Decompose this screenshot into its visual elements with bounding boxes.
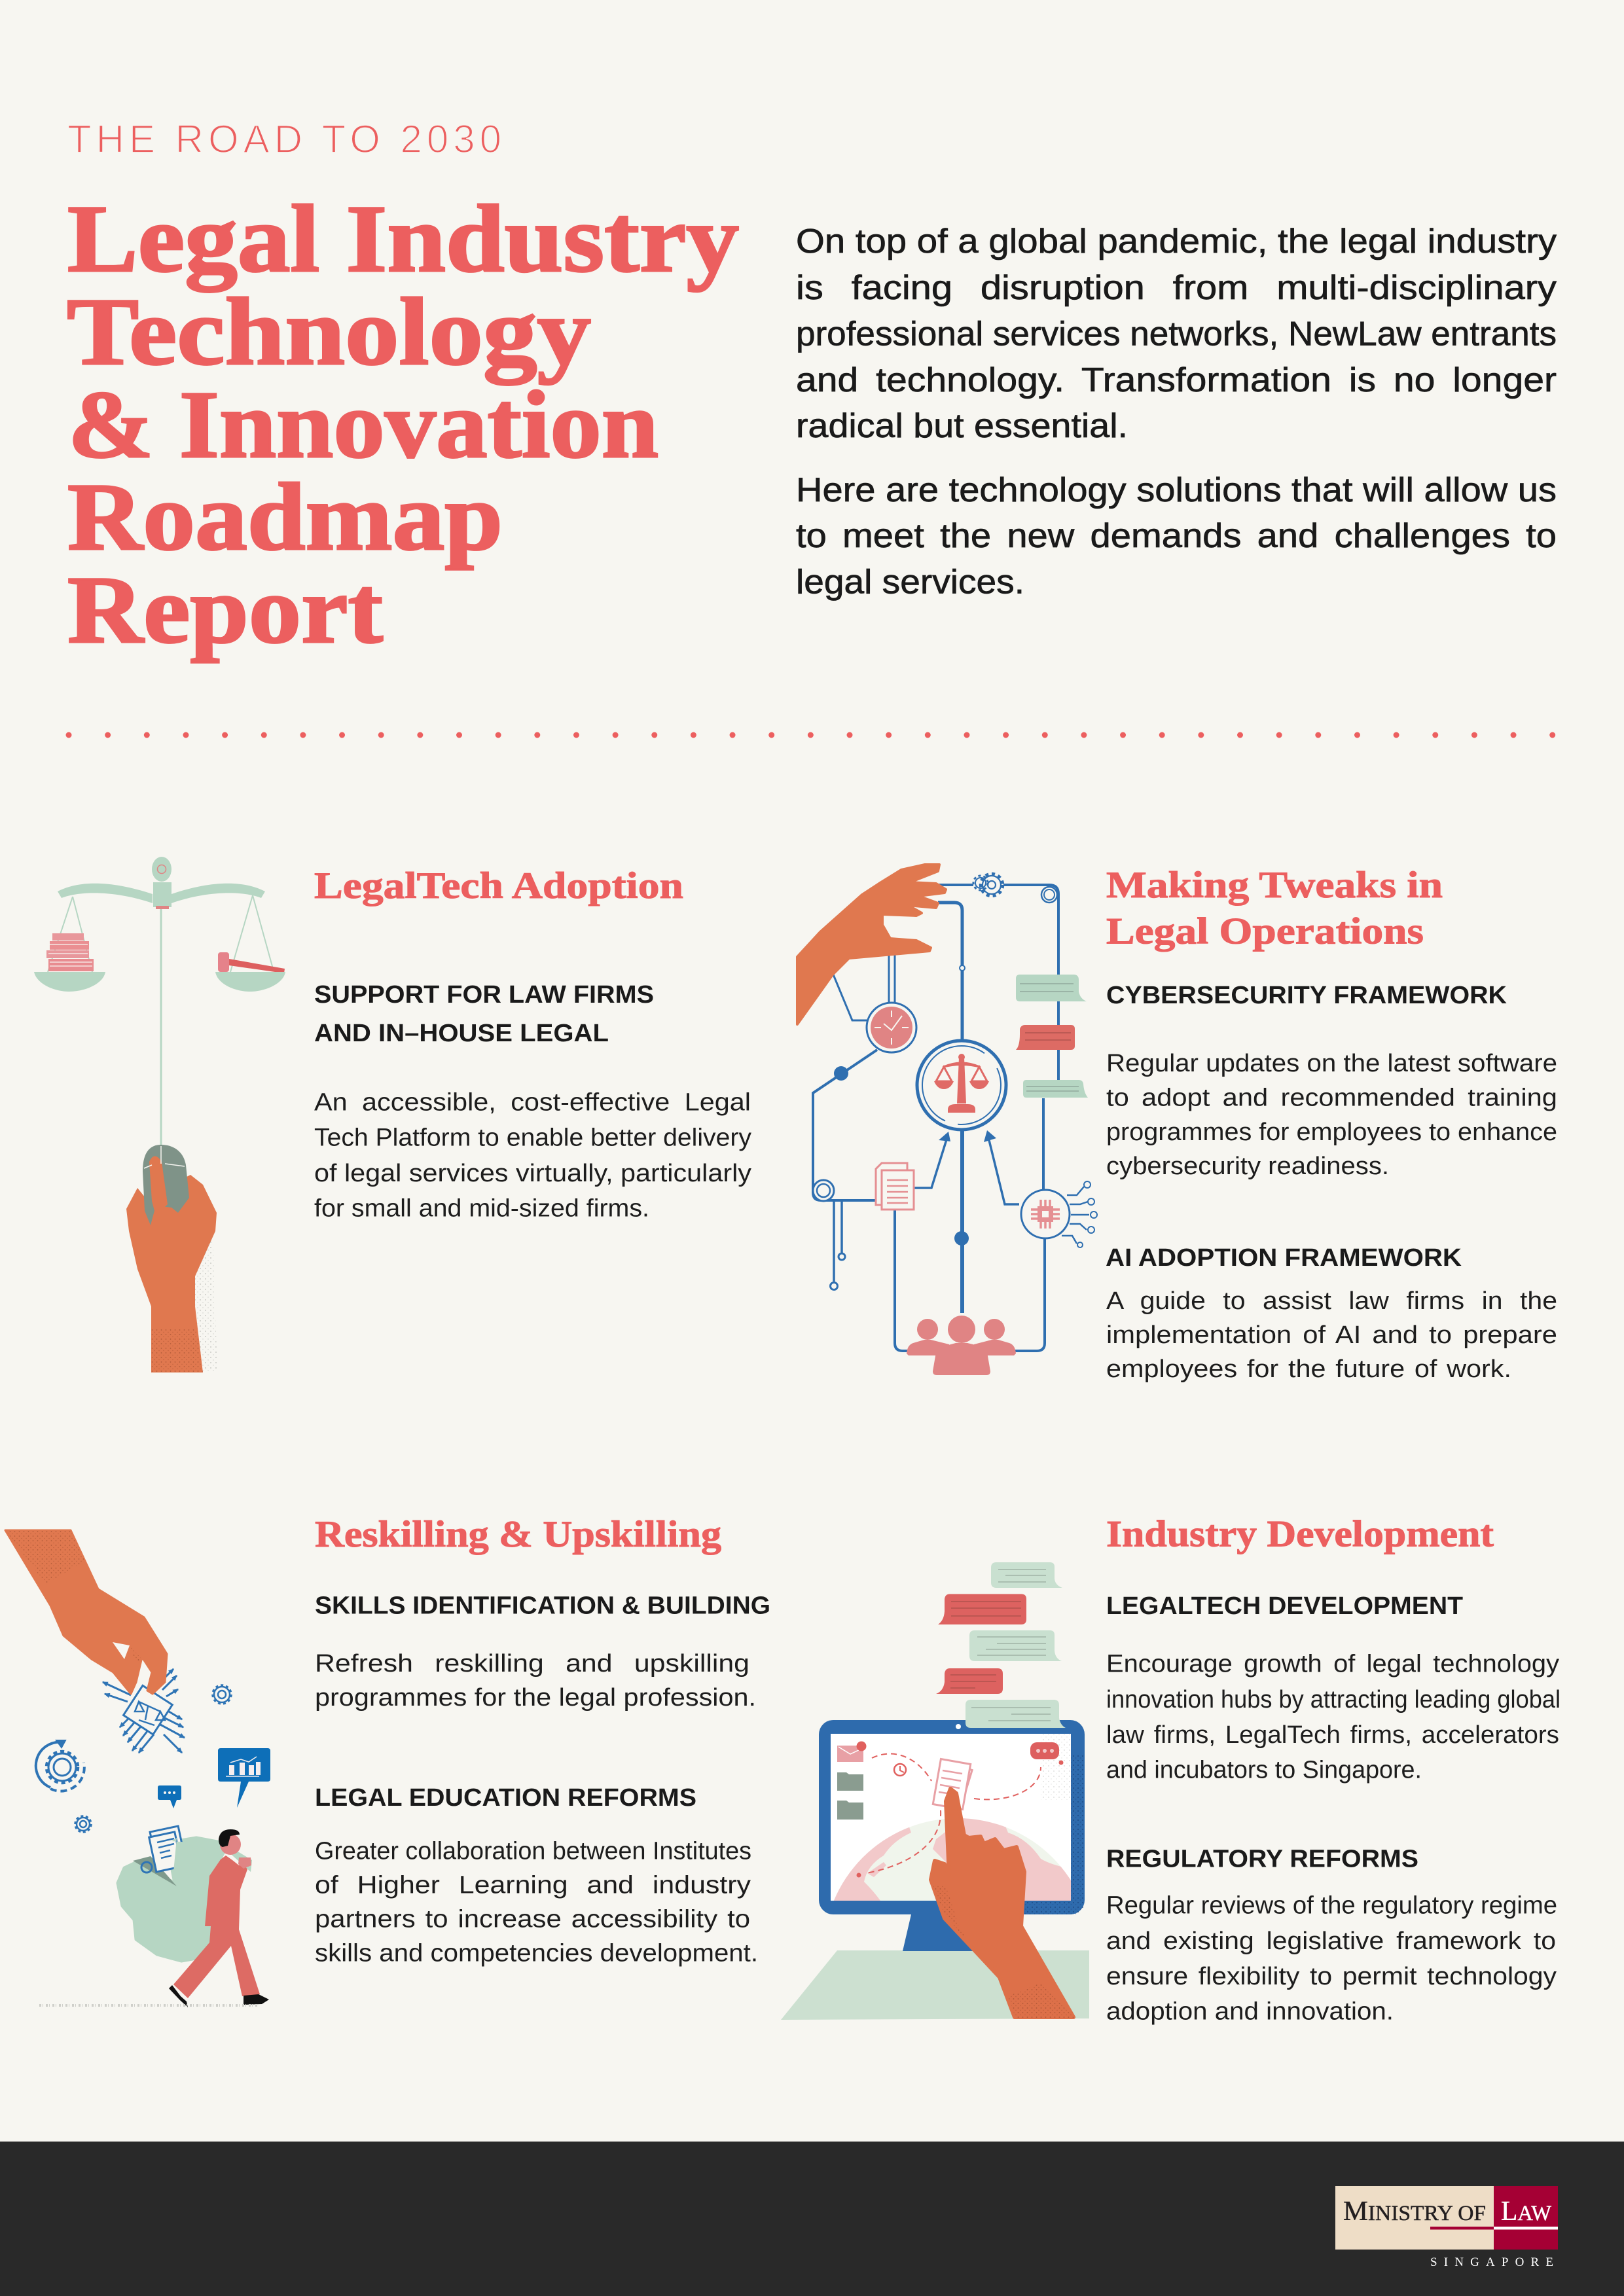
body text: for small and mid-sized firms. xyxy=(314,1195,649,1223)
monitor xyxy=(819,1720,1085,1951)
illustration: hand placing chip, man with sack xyxy=(5,1530,270,2007)
title: Report xyxy=(67,556,383,663)
subheading: SUPPORT FOR LAW FIRMS xyxy=(314,981,654,1009)
icon: man carrying sack xyxy=(169,1829,269,2007)
icon: chart bubble xyxy=(218,1748,270,1808)
icon: legal chip xyxy=(103,1669,185,1753)
body text xyxy=(1106,1287,1557,1383)
icon: balance scale xyxy=(34,857,285,1147)
panel: Making Tweaks in Legal Operations xyxy=(797,865,1557,1383)
subheading: REGULATORY REFORMS xyxy=(1106,1846,1418,1873)
icon: arm and hand xyxy=(5,1530,167,1694)
body text: programmes for the legal profession. xyxy=(315,1684,756,1712)
body text: innovation hubs by attracting leading global xyxy=(1106,1686,1561,1713)
subheading: LEGAL EDUCATION REFORMS xyxy=(315,1784,696,1812)
icon: people xyxy=(907,1316,1016,1375)
illustration: circuit of legal operations xyxy=(797,865,1097,1375)
heading xyxy=(1106,865,1443,952)
body text xyxy=(314,1089,751,1223)
title: Roadmap xyxy=(67,463,503,570)
body text: Encourage growth of legal technology xyxy=(1106,1651,1559,1678)
heading: Industry Development xyxy=(1106,1513,1494,1555)
icon: hand on computer mouse xyxy=(126,1145,217,1372)
screen icons xyxy=(837,1741,1063,1877)
icon: clock xyxy=(867,1003,916,1052)
icon: pointing hand xyxy=(931,1789,1075,2018)
intro paragraph: and technology. Transformation is no longer xyxy=(796,361,1557,399)
intro paragraph: to meet the new demands and challenges to xyxy=(796,517,1557,555)
body text xyxy=(315,1838,758,1967)
circuit lines xyxy=(813,885,1089,1351)
intro paragraph xyxy=(796,223,1557,601)
icon: central scales xyxy=(917,1041,1006,1130)
subheading: AI ADOPTION FRAMEWORK xyxy=(1106,1244,1462,1272)
icon: small gear xyxy=(75,1816,91,1832)
body text: partners to increase accessibility to xyxy=(315,1906,750,1933)
arrowheads xyxy=(939,1130,996,1142)
body text: A guide to assist law firms in the xyxy=(1106,1287,1557,1315)
icon: AI chip xyxy=(1021,1190,1070,1238)
icon: hand xyxy=(797,865,946,1024)
icon: gear with cycle arrow xyxy=(36,1740,84,1791)
body text xyxy=(315,1650,756,1712)
body text: implementation of AI and to prepare xyxy=(1106,1321,1557,1349)
intro paragraph: radical but essential. xyxy=(796,407,1128,445)
illustration: monitor with chat bubbles and pointing hand xyxy=(781,1562,1089,2020)
body text: Tech Platform to enable better delivery xyxy=(314,1124,751,1152)
icon: chat bubble xyxy=(158,1785,181,1808)
desk xyxy=(781,1950,1089,2020)
subheading: SKILLS IDENTIFICATION & BUILDING xyxy=(315,1592,770,1619)
intro paragraph: professional services networks, NewLaw entrants xyxy=(796,315,1557,353)
icon: speech bubbles xyxy=(1016,975,1088,1098)
body text: and incubators to Singapore. xyxy=(1106,1757,1422,1784)
body text: An accessible, cost-effective Legal xyxy=(314,1089,751,1117)
body text: programmes for employees to enhance xyxy=(1106,1119,1557,1146)
logo: Ministry of Law Singapore xyxy=(1335,2186,1558,2269)
body text: employees for the future of work. xyxy=(1106,1355,1511,1383)
body text: of Higher Learning and industry xyxy=(315,1872,751,1899)
title: & Innovation xyxy=(68,371,659,478)
body text: Greater collaboration between Institutes xyxy=(315,1838,751,1865)
icon: documents xyxy=(876,1163,914,1210)
icon: gear pair xyxy=(973,874,1003,896)
intro paragraph: Here are technology solutions that will allow us xyxy=(796,471,1557,509)
body text: adoption and innovation. xyxy=(1106,1998,1394,2025)
body text: law firms, LegalTech firms, accelerators xyxy=(1106,1721,1559,1749)
panel: Reskilling & Upskilling xyxy=(5,1514,770,2007)
body text: cybersecurity readiness. xyxy=(1106,1153,1389,1180)
body text: and existing legislative framework to xyxy=(1106,1928,1556,1955)
heading: Reskilling & Upskilling xyxy=(315,1514,721,1555)
intro paragraph: On top of a global pandemic, the legal industry xyxy=(796,223,1557,260)
footer bar xyxy=(0,2142,1624,2296)
logo: Ministry of Law Singapore: SINGAPORE xyxy=(1430,2255,1553,2269)
subheading: AND IN–HOUSE LEGAL xyxy=(314,1020,609,1047)
logo: Ministry of Law Singapore: LAW xyxy=(1501,2197,1552,2227)
ground grain xyxy=(39,2004,257,2007)
ring nodes xyxy=(813,887,1097,1289)
title: Legal Industry xyxy=(67,185,739,292)
heading: Making Tweaks in xyxy=(1106,865,1443,906)
panel: LegalTech Adoption xyxy=(34,857,751,1372)
body text: Regular reviews of the regulatory regime xyxy=(1106,1892,1557,1919)
title xyxy=(67,185,739,663)
subheading xyxy=(314,981,654,1047)
subheading: CYBERSECURITY FRAMEWORK xyxy=(1106,982,1507,1009)
heading: Legal Operations xyxy=(1106,911,1424,952)
icon: chat bubbles xyxy=(936,1562,1066,1728)
illustration: scales on a mouse cord held by a hand xyxy=(34,857,285,1372)
title: Technology xyxy=(67,278,591,385)
body text xyxy=(1106,1651,1561,1784)
globe on screen xyxy=(834,1818,1071,1901)
icon: small gear xyxy=(213,1685,231,1704)
body text: Refresh reskilling and upskilling xyxy=(315,1650,749,1677)
body text: Regular updates on the latest software xyxy=(1106,1050,1557,1077)
intro paragraph: legal services. xyxy=(796,563,1024,601)
eyebrow: the road to 2030: THE ROAD TO 2030 xyxy=(67,117,501,161)
body text: skills and competencies development. xyxy=(315,1940,758,1967)
subheading: LEGALTECH DEVELOPMENT xyxy=(1106,1592,1463,1620)
body text xyxy=(1106,1892,1557,2025)
body text: ensure flexibility to permit technology xyxy=(1106,1963,1557,1990)
body text: of legal services virtually, particularly xyxy=(314,1160,751,1187)
heading: LegalTech Adoption xyxy=(314,865,683,906)
intro paragraph: is facing disruption from multi-disciplinary xyxy=(796,269,1557,307)
icon: document in sack xyxy=(133,1826,190,1886)
body text: to adopt and recommended training xyxy=(1106,1084,1557,1111)
body text xyxy=(1106,1050,1557,1180)
logo: Ministry of Law Singapore: MINISTRY OF xyxy=(1343,2197,1486,2227)
icon: green sack xyxy=(118,1838,227,1961)
panel: Industry Development xyxy=(781,1520,1559,2025)
